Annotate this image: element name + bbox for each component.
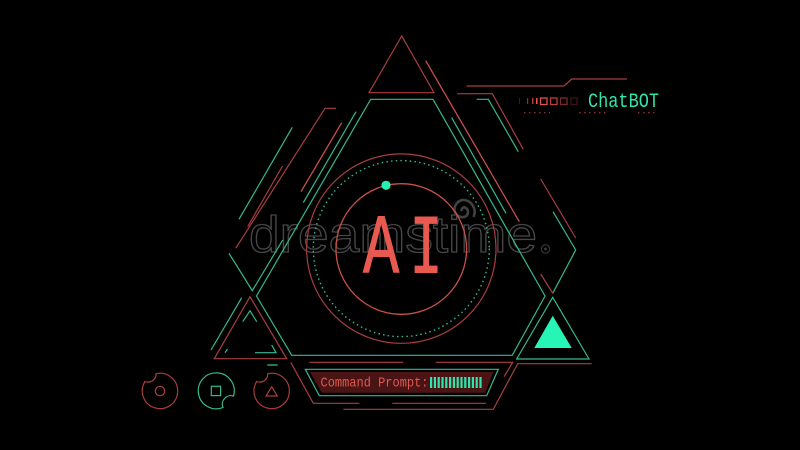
green marker dot (381, 181, 391, 190)
AI title: I (410, 204, 443, 298)
watermark registered mark (541, 245, 550, 253)
right filled triangle (534, 316, 572, 348)
lower frame lines (291, 362, 592, 409)
top triangle (369, 36, 434, 93)
chatbot label: ChatBOT (588, 91, 659, 114)
chatbot indicator squares (519, 98, 577, 104)
dotted green ring (313, 161, 489, 337)
AI title (363, 202, 443, 298)
watermark swirl (454, 200, 475, 217)
panel outline (305, 369, 498, 396)
right side bracket lines (426, 61, 576, 293)
panel fill (310, 372, 493, 393)
command prompt panel (305, 369, 498, 396)
main green hexagonal triangle frame (256, 99, 545, 355)
chatbot dotted ticks (524, 112, 656, 114)
watermark text: dreamstime (249, 206, 537, 263)
inner red ring (336, 184, 467, 314)
icon: square button (198, 373, 234, 409)
small green dash (267, 364, 278, 366)
left side bracket lines (229, 108, 356, 291)
left small triangle (211, 297, 287, 359)
icon: circle button (142, 373, 178, 409)
outer red ring (307, 154, 496, 343)
command prompt text: Command Prompt: (320, 376, 428, 392)
progress bars (430, 377, 482, 388)
icon: triangle button (254, 373, 289, 409)
top right connector line (467, 79, 627, 86)
AI title: A (363, 202, 399, 298)
right triangle outline (517, 297, 589, 359)
